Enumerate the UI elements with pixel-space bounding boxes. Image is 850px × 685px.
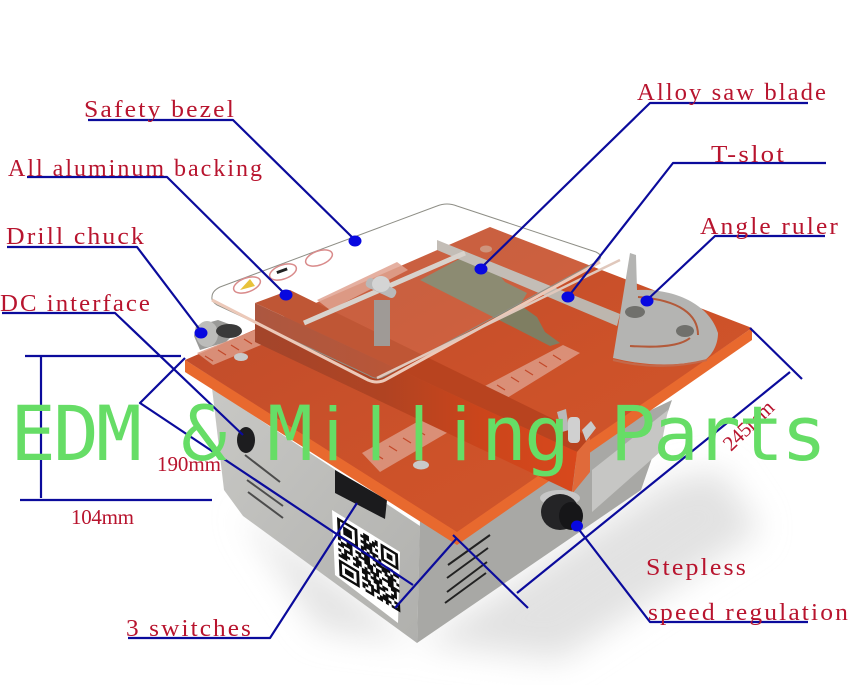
table top [185, 227, 752, 545]
post with wing nut [374, 300, 390, 346]
speed knob [540, 490, 583, 530]
leader dots [194, 236, 654, 532]
vents [245, 455, 490, 603]
drill chuck [194, 320, 242, 350]
watermark: EDM & Milling Parts: illi [325, 392, 469, 477]
label: DC interface: DC interface [0, 291, 152, 317]
blade [420, 257, 560, 346]
angle ruler [613, 253, 718, 366]
leader lines and dimension lines [2, 103, 826, 638]
dimension: 104mm: 104mm [71, 505, 134, 529]
guard rods [304, 253, 465, 323]
rear spec label [592, 410, 668, 512]
label: T-slot: T-slot [711, 142, 786, 168]
T-slot strip [437, 240, 620, 326]
label: Safety bezel: Safety bezel [84, 97, 236, 123]
label: speed regulation: speed regulation [648, 600, 850, 626]
label: Drill chuck: Drill chuck [6, 224, 146, 250]
dimension: 190mm: 190mm [157, 452, 221, 476]
label: All aluminum backing: All aluminum backing [8, 156, 264, 182]
rocker switch [335, 470, 387, 519]
screws [234, 353, 248, 361]
watermark: EDM & Milling Parts: ng Parts [481, 389, 827, 478]
label: 3 switches: 3 switches [126, 616, 253, 642]
warning icons [231, 247, 335, 296]
QR code [332, 510, 400, 623]
label: Stepless: Stepless [646, 555, 748, 581]
fence wing bolt [557, 409, 596, 443]
dimension: 245mm: 245mm [718, 395, 779, 456]
acrylic safety guard [212, 204, 620, 382]
ruler scales [197, 262, 580, 472]
DC jack [237, 427, 255, 453]
saw body [212, 388, 672, 643]
watermark: EDM & Milling Parts: EDM & M [10, 389, 313, 478]
rip fence [255, 290, 590, 494]
label: Alloy saw blade: Alloy saw blade [637, 80, 828, 106]
label: Angle ruler: Angle ruler [700, 214, 840, 240]
floor shadow [240, 470, 760, 660]
